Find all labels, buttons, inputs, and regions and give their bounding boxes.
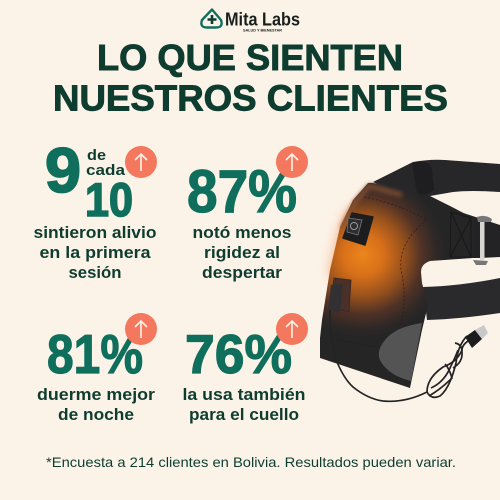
stat: 9 de cada 10: sintieron alivio xyxy=(34,224,156,242)
stat: 9 de cada 10: de xyxy=(87,148,106,164)
stat: 87%: 87% xyxy=(187,158,297,225)
stat: 87%: despertar xyxy=(202,264,283,282)
usb plug on brace xyxy=(328,284,343,313)
stat: 9 de cada 10 xyxy=(34,136,156,282)
icon: logo drop with cross xyxy=(201,10,222,28)
product: heated shoulder brace xyxy=(320,160,500,401)
stat: 81% xyxy=(37,323,156,424)
logo name: Mita Labs xyxy=(225,10,300,30)
stat: 81%: de noche xyxy=(58,406,134,424)
stat: 87% xyxy=(187,158,297,282)
stat: 87%: rigidez al xyxy=(204,244,280,262)
icon: arrow badge 4 xyxy=(276,313,308,345)
stat: 9 de cada 10: en la primera xyxy=(40,244,151,262)
footnote: *Encuesta a 214 clientes en Bolivia. Resultados pueden variar. xyxy=(46,454,456,470)
stat: 76% xyxy=(182,323,306,424)
stat: 76%: 76% xyxy=(185,323,292,385)
logo tagline: SALUD Y BIENESTAR xyxy=(243,28,282,32)
icon: power button xyxy=(343,213,373,245)
stat: 9 de cada 10: 9 xyxy=(45,136,81,206)
stat: 76%: la usa también xyxy=(182,386,306,404)
icon: arrow badge 3 xyxy=(125,313,157,345)
connector patch xyxy=(330,278,351,312)
stat: 9 de cada 10: cada xyxy=(86,163,126,179)
icon: arrow badge 1 xyxy=(125,146,157,178)
title: NUESTROS CLIENTES xyxy=(53,78,448,118)
usb cable xyxy=(330,310,488,401)
stat: 9 de cada 10: sesión xyxy=(68,264,122,282)
title xyxy=(53,37,448,118)
icon: arrow badge 2 xyxy=(276,146,308,178)
stat: 87%: notó menos xyxy=(192,224,292,242)
stat: 81%: 81% xyxy=(47,323,143,385)
stat: 81%: duerme mejor xyxy=(37,386,156,404)
stat: 9 de cada 10: 10 xyxy=(85,173,133,226)
logo xyxy=(201,10,300,32)
title: LO QUE SIENTEN xyxy=(97,37,403,78)
buckle xyxy=(473,216,492,265)
stat: 76%: para el cuello xyxy=(189,406,299,424)
